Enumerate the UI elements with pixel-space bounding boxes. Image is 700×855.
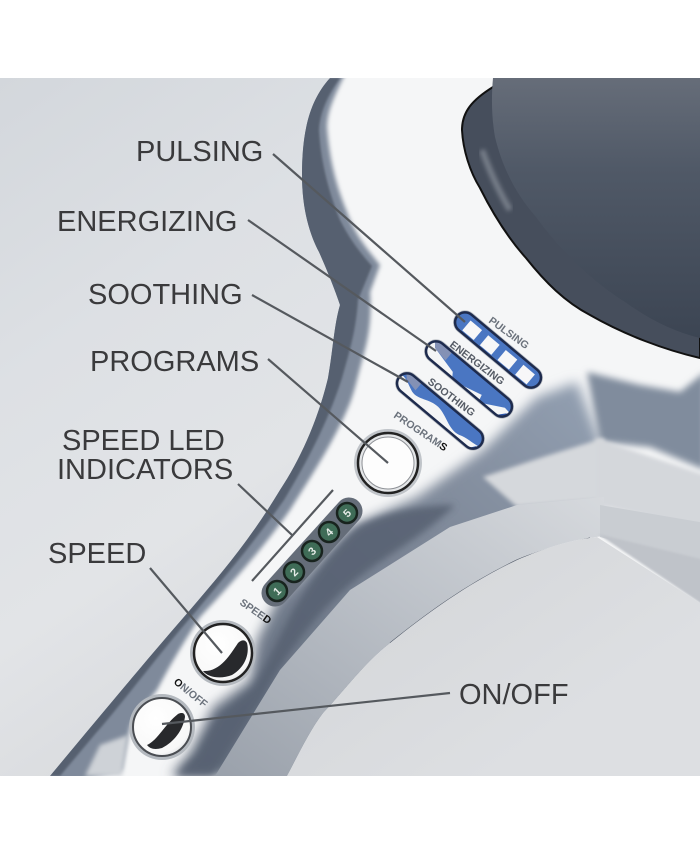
product labels: PULSING xyxy=(486,315,531,352)
control: LED strip xyxy=(267,503,357,601)
light reflection band xyxy=(483,438,604,507)
shaded silver zone under the control panel xyxy=(170,382,600,776)
button: speed xyxy=(190,620,256,686)
button: on/off xyxy=(129,694,195,760)
callout text: on/off: ON/OFF xyxy=(459,679,569,711)
callout text: pulsing: PULSING xyxy=(136,136,263,168)
right silver patch xyxy=(587,372,700,470)
cup dome xyxy=(492,78,700,338)
product labels: SPEED xyxy=(237,597,274,627)
button: programs xyxy=(354,429,422,497)
product labels: SOOTHING xyxy=(425,376,477,419)
callout text: programs: PROGRAMS xyxy=(90,346,259,378)
massage head cup xyxy=(462,78,700,358)
control: energizing pill xyxy=(424,339,514,419)
callout text: speed led indicators: INDICATORS xyxy=(57,454,233,486)
control: soothing pill xyxy=(395,371,485,451)
control: pulsing pill xyxy=(453,310,543,390)
control: LED strip: 5 xyxy=(341,507,354,520)
lower tube of the handle xyxy=(215,497,604,776)
control: LED strip: 1 xyxy=(271,585,284,598)
callout text: speed: SPEED xyxy=(48,538,146,570)
control: LED strip: 2 xyxy=(288,566,301,579)
control: LED strip: 3 xyxy=(306,545,319,558)
product labels: ENERGIZING xyxy=(447,339,507,388)
control: LED strip: 4 xyxy=(323,526,337,539)
product labels: ON/OFF xyxy=(171,676,210,711)
cup rim xyxy=(462,78,700,358)
callout lines xyxy=(150,154,465,724)
callout text: soothing: SOOTHING xyxy=(88,279,243,311)
product labels: PROGRAMS xyxy=(391,410,449,454)
product labels xyxy=(171,315,531,711)
callout text: speed led indicators: SPEED LED xyxy=(62,425,225,457)
dark contour along the upper handle xyxy=(40,70,380,790)
callout text: energizing: ENERGIZING xyxy=(57,206,237,238)
lower-left silver xyxy=(85,735,128,776)
